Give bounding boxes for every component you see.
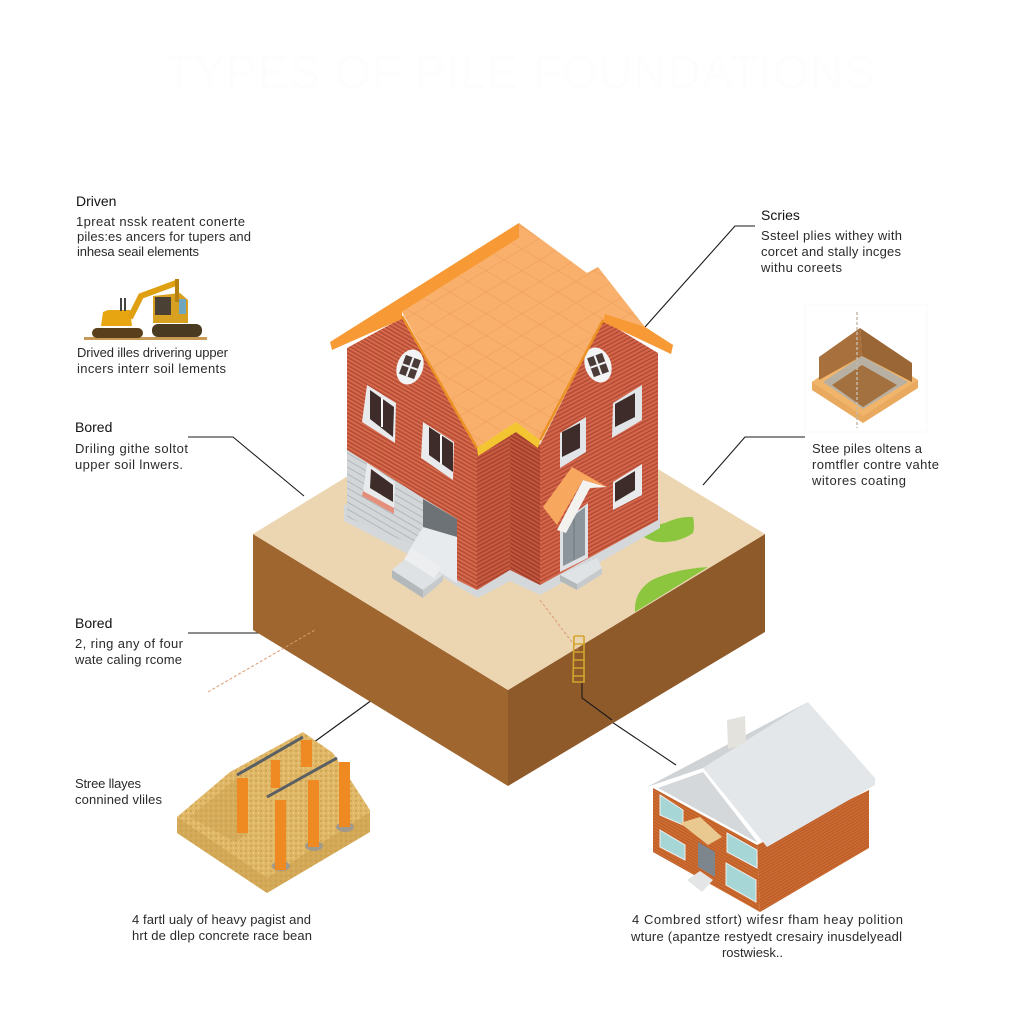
text: bored 1	[75, 419, 188, 472]
door step	[560, 558, 602, 590]
text: driven	[76, 193, 251, 259]
sand shade	[177, 812, 370, 893]
roof: right eave	[603, 314, 673, 354]
text: bored 2: wate caling rcome	[74, 652, 182, 667]
text: screws: Scries	[761, 207, 800, 223]
text: combined caption: wture (apantze restyedt cresairy inusdelyeadl	[630, 929, 902, 944]
text: driven: inhesa seail elements	[77, 244, 200, 259]
text: screws: corcet and stally incges	[761, 244, 902, 259]
text: steel piles coating: romtfler contre vahte	[812, 457, 939, 472]
roof: shingle field	[402, 223, 673, 448]
small house: back roof	[647, 702, 808, 787]
text: steel piles coating	[811, 441, 939, 488]
chain	[856, 312, 858, 428]
window: left upper 2	[421, 422, 454, 480]
text: driven: piles:es ancers for tupers and	[77, 229, 251, 244]
text: driven: Driven	[76, 193, 116, 209]
plinth	[344, 470, 660, 598]
roof: valley edges	[402, 316, 603, 448]
text: heavy load caption: 4 fartl ualy of heavy pagist and	[132, 912, 311, 927]
text: heavy load caption: hrt de dlep concrete race bean	[132, 928, 312, 943]
wall: front bay left-facing	[510, 428, 540, 585]
floor	[832, 365, 897, 407]
gray feet	[272, 822, 354, 871]
callout leader lines	[188, 226, 805, 765]
pile bars	[237, 737, 337, 797]
roof: left eave	[330, 223, 519, 350]
left slope shade	[190, 778, 248, 842]
dashed guide lines	[208, 600, 578, 692]
text: bored 1: upper soil lnwers.	[75, 457, 183, 472]
grey ring	[823, 356, 908, 409]
base slab	[812, 352, 918, 423]
door	[560, 503, 588, 572]
ground: top face	[253, 378, 765, 690]
roof: gold trim	[477, 422, 540, 456]
wall: right	[540, 320, 658, 585]
sand block with piles	[177, 732, 370, 893]
text: screws	[760, 207, 902, 275]
small house: gable	[658, 772, 758, 843]
text: bored 1: Bored	[75, 419, 112, 435]
small house: awning	[680, 817, 722, 845]
text: bored 1: Driling githe soltot	[75, 441, 188, 456]
icon: coil pile	[573, 636, 585, 682]
wall: front bay right-facing	[477, 428, 510, 590]
window: left oval	[392, 346, 428, 388]
window: lower on stone	[362, 463, 395, 514]
stone base	[347, 450, 423, 549]
small house: door	[698, 842, 715, 877]
porch roof	[543, 467, 607, 533]
grass patches	[635, 517, 708, 612]
text: combined caption	[630, 912, 903, 960]
title: TYPES OF PILE FOUNDATIONS	[165, 46, 875, 98]
icon: excavator	[84, 279, 207, 340]
text: bored 2	[74, 615, 184, 667]
small house: main roof	[703, 702, 875, 847]
small house: windows	[660, 795, 757, 902]
text: combined caption: rostwiesk..	[722, 945, 783, 960]
panel: foundation detail icon	[805, 305, 927, 432]
small house: right wall	[757, 790, 869, 912]
text: steel layers	[75, 776, 162, 807]
text: combined caption: 4 Combred stfort) wifesr fham heay polition	[632, 912, 903, 927]
callout line over ground	[582, 683, 612, 720]
roof	[330, 223, 673, 456]
orange piles	[237, 740, 350, 870]
text: bored 2: 2, ring any of four	[75, 636, 184, 651]
text: steel piles coating: Stee piles oltens a	[812, 441, 923, 456]
small house: steps	[687, 871, 713, 892]
small house	[647, 702, 875, 912]
text: screws: withu coreets	[760, 260, 842, 275]
text: heavy load caption	[132, 912, 312, 943]
ground: right face	[508, 534, 765, 786]
text: steel layers: connined vliles	[75, 792, 162, 807]
entry steps	[392, 548, 443, 598]
text: driven: 1preat nssk reatent conerte	[76, 214, 245, 229]
text: driven detail: Drived illes drivering upper	[77, 345, 229, 360]
text: screws: Ssteel plies withey with	[761, 228, 902, 243]
wood walls	[819, 328, 862, 380]
main brick house	[330, 223, 673, 598]
sand body	[177, 732, 370, 893]
window: left upper 1	[362, 385, 396, 443]
wall: left	[347, 318, 477, 590]
text: steel piles coating: witores coating	[811, 473, 906, 488]
small house: chimney	[727, 716, 746, 749]
text: driven detail	[77, 345, 229, 376]
ground block	[253, 378, 765, 786]
window: right oval	[580, 344, 616, 386]
ground: left face	[253, 534, 508, 786]
window: right 1	[560, 417, 586, 468]
garage opening	[408, 499, 457, 583]
text: driven detail: incers interr soil lements	[77, 361, 226, 376]
text: bored 2: Bored	[75, 615, 112, 631]
window: right 3	[613, 464, 642, 510]
small house: front wall	[653, 788, 760, 912]
window: right 2	[612, 385, 642, 438]
text: steel layers: Stree llayes	[75, 776, 142, 791]
